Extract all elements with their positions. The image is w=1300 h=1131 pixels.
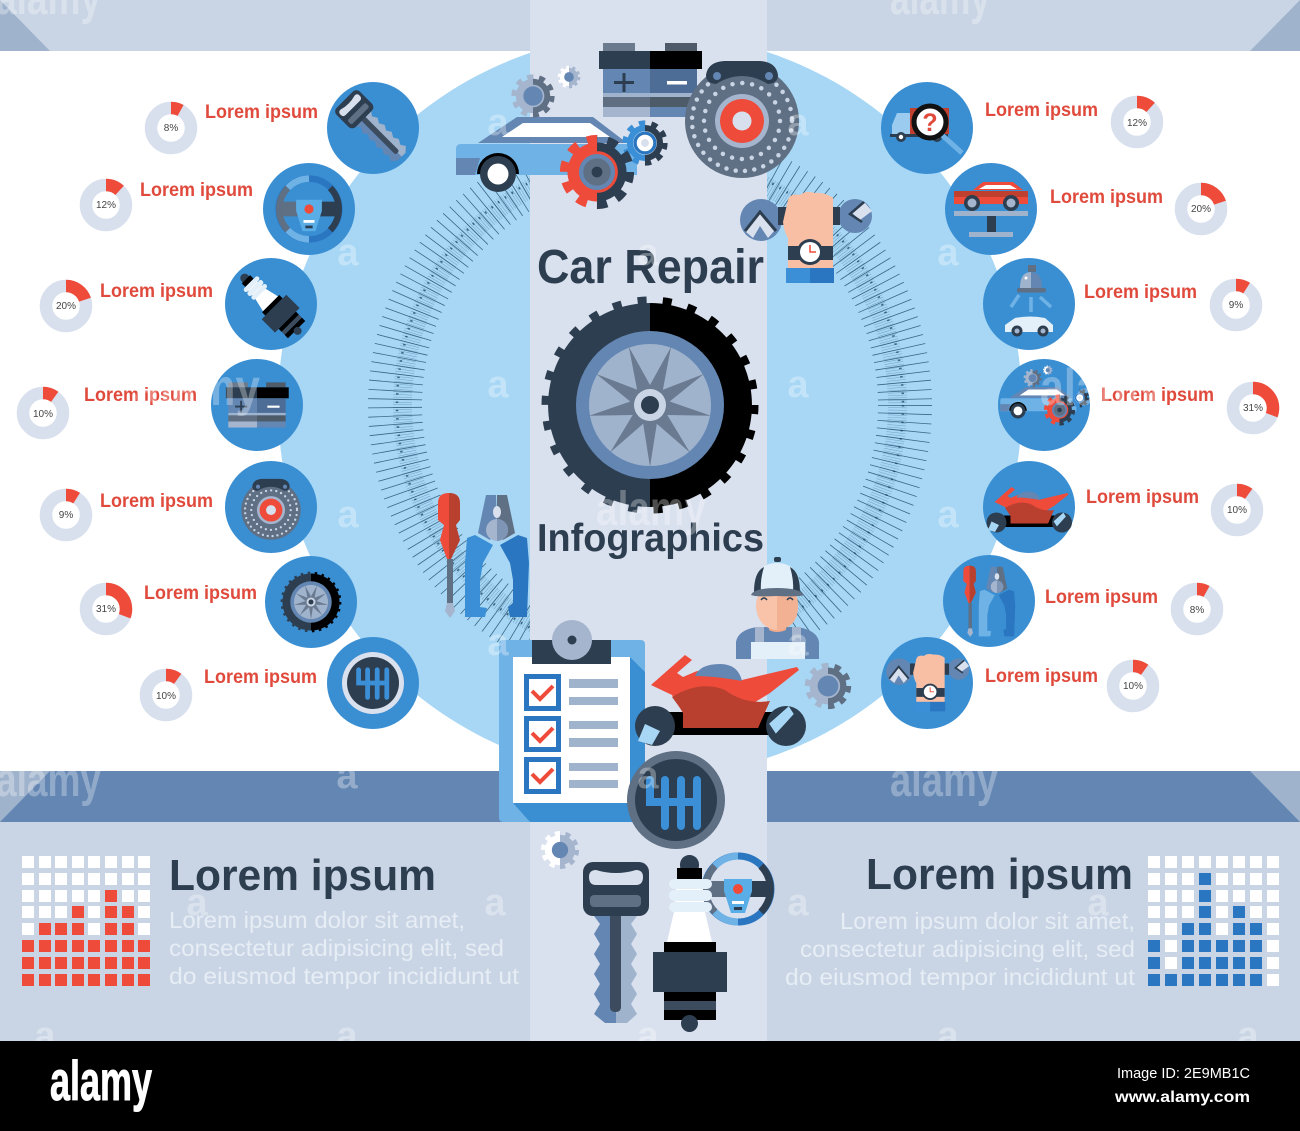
icon: screwdriver and pliers xyxy=(943,555,1035,647)
label 1: Lorem ipsum xyxy=(985,100,1098,121)
donut 12%: 12% xyxy=(96,200,116,211)
stock watermarks: a xyxy=(1087,882,1109,924)
label 2: Lorem ipsum xyxy=(1050,187,1163,208)
label 5: Lorem ipsum xyxy=(1086,487,1199,508)
footer bar xyxy=(0,1041,1300,1131)
stock watermarks: alamy xyxy=(1040,359,1162,417)
stock watermarks: alamy xyxy=(890,754,998,807)
label 6: Lorem ipsum xyxy=(1045,587,1158,608)
stock watermarks: a xyxy=(937,1015,959,1057)
icon: truck inspection: ? xyxy=(922,109,938,137)
donut 8% xyxy=(151,108,191,148)
icon: battery xyxy=(211,359,303,451)
left heading: Lorem ipsum xyxy=(169,851,436,900)
left icon circles xyxy=(211,82,419,729)
right donut charts xyxy=(1113,102,1273,706)
stock watermarks: alamy xyxy=(135,359,260,417)
stock watermarks: a xyxy=(937,232,959,274)
icon: gear shifter xyxy=(327,637,419,729)
label 6: Lorem ipsum xyxy=(144,583,257,604)
donut 8%: 8% xyxy=(1190,605,1204,616)
label 7: Lorem ipsum xyxy=(985,666,1098,687)
left square grid chart xyxy=(22,856,150,986)
left body text: Lorem ipsum dolor sit amet, xyxy=(169,907,465,933)
icon: motorcycle xyxy=(983,461,1075,553)
right body text xyxy=(785,908,1136,990)
stock watermarks: a xyxy=(787,622,809,664)
icon: clipboard checklist xyxy=(499,620,645,822)
label 4: Lorem ipsum xyxy=(1101,385,1214,406)
checklist row 3 xyxy=(524,757,618,794)
icon: truck inspection xyxy=(881,82,973,174)
title: Car Repair: Car Repair xyxy=(537,241,764,294)
image id: Image ID: 2E9MB1C xyxy=(1117,1065,1250,1082)
right body text: consectetur adipisicing elit, sed xyxy=(800,936,1135,962)
donut 12% xyxy=(1117,102,1157,142)
left donut charts xyxy=(23,108,191,715)
donut 10% xyxy=(23,393,63,433)
stock watermarks: a xyxy=(787,882,809,924)
stock watermarks: a xyxy=(937,494,959,536)
icon: key xyxy=(327,82,419,174)
website: www.alamy.com xyxy=(1114,1089,1250,1106)
alamy logo: alamy xyxy=(50,1049,152,1112)
icon: motorcycle large xyxy=(635,655,806,746)
donut 12% xyxy=(86,185,126,225)
donut 12%: 12% xyxy=(1127,118,1147,129)
icon: small white gear xyxy=(544,834,576,866)
radial tick ring xyxy=(395,150,905,660)
left body text: do eiusmod tempor incididunt ut xyxy=(169,963,520,989)
icon: gray gear xyxy=(808,666,848,706)
icon: brake disc large xyxy=(685,61,799,178)
stock watermarks: a xyxy=(487,364,509,406)
donut 20%: 20% xyxy=(1191,204,1211,215)
donut 9%: 9% xyxy=(1229,300,1243,311)
left body text: consectetur adipisicing elit, sed xyxy=(169,935,504,961)
label 7: Lorem ipsum xyxy=(204,667,317,688)
donut 31%: 31% xyxy=(1243,403,1263,414)
bottom band xyxy=(0,771,1300,822)
donut 8% xyxy=(1177,589,1217,629)
central light blue circle xyxy=(278,33,1022,777)
icon: battery large xyxy=(599,43,702,117)
label 4: Lorem ipsum xyxy=(84,385,197,406)
donut 9% xyxy=(1216,285,1256,325)
icon: spark plug xyxy=(225,258,317,350)
donut 10% xyxy=(1217,490,1257,530)
icon: brake disc xyxy=(225,461,317,553)
stock watermarks: a xyxy=(787,102,809,144)
checklist row 1 xyxy=(524,674,618,711)
stock watermarks: a xyxy=(787,364,809,406)
stock watermarks: alamy xyxy=(0,754,101,807)
donut 10% lower: 10% xyxy=(1123,681,1143,692)
stock watermarks: a xyxy=(484,882,506,924)
icon: car wash lamp xyxy=(983,258,1075,350)
icon: car on lift xyxy=(945,163,1037,255)
checklist row 2 xyxy=(524,716,618,752)
title: Infographics: Infographics xyxy=(537,517,764,560)
donut 20% xyxy=(46,286,86,326)
donut 10%: 10% xyxy=(1227,505,1247,516)
icon: steering wheel large xyxy=(705,856,771,922)
left labels xyxy=(84,102,318,688)
stock watermarks: a xyxy=(637,1015,659,1057)
right body text: Lorem ipsum dolor sit amet, xyxy=(840,908,1135,934)
donut 20%: 20% xyxy=(56,301,76,312)
bottom panel xyxy=(0,822,1300,1041)
stock watermarks: a xyxy=(336,755,358,797)
icon: hand with wrenches large xyxy=(740,192,872,283)
icon: steering wheel xyxy=(263,163,355,255)
label 3: Lorem ipsum xyxy=(100,281,213,302)
donut 10% lower xyxy=(1113,666,1153,706)
icon: mechanic xyxy=(736,557,819,659)
icon: car with gears large xyxy=(456,67,664,204)
icon: large tire xyxy=(546,301,754,509)
stock watermarks: a xyxy=(637,232,659,274)
center column xyxy=(530,0,767,1041)
right square grid chart xyxy=(1148,856,1279,986)
stock watermarks: a xyxy=(336,1015,358,1057)
icon: gear shifter large xyxy=(627,751,725,849)
stock watermarks: a xyxy=(337,494,359,536)
donut 9% xyxy=(46,495,86,535)
right heading: Lorem ipsum xyxy=(866,850,1133,899)
right icon circles xyxy=(881,82,1090,729)
icon: screwdriver and pliers large xyxy=(438,493,529,618)
left body text xyxy=(169,907,520,989)
icon: tire xyxy=(265,556,357,648)
stock watermarks: a xyxy=(487,102,509,144)
donut 20% xyxy=(1181,189,1221,229)
right body text: do eiusmod tempor incididunt ut xyxy=(785,964,1136,990)
stock watermarks: a xyxy=(637,755,659,797)
icon: spark plug large xyxy=(653,855,727,1032)
stock watermarks: a xyxy=(337,232,359,274)
top band xyxy=(0,0,1300,51)
stock watermarks: a xyxy=(487,622,509,664)
donut 10% lower: 10% xyxy=(156,691,176,702)
donut 9%: 9% xyxy=(59,510,73,521)
label 2: Lorem ipsum xyxy=(140,180,253,201)
donut 10%: 10% xyxy=(33,409,53,420)
donut 31% xyxy=(86,589,126,629)
icon: hand with wrenches xyxy=(881,637,973,729)
donut 31%: 31% xyxy=(96,604,116,615)
label 1: Lorem ipsum xyxy=(205,102,318,123)
donut 8%: 8% xyxy=(164,123,178,134)
label 3: Lorem ipsum xyxy=(1084,282,1197,303)
donut 10% lower xyxy=(146,675,186,715)
icon: car with gears xyxy=(998,359,1090,451)
icon: key large xyxy=(583,862,649,1023)
stock watermarks: a xyxy=(1237,1015,1259,1057)
right labels xyxy=(985,100,1214,687)
stock watermarks: a xyxy=(34,1015,56,1057)
label 5: Lorem ipsum xyxy=(100,491,213,512)
donut 31% xyxy=(1233,388,1273,428)
stock watermarks: alamy xyxy=(596,483,706,536)
stock watermarks: a xyxy=(186,882,208,924)
